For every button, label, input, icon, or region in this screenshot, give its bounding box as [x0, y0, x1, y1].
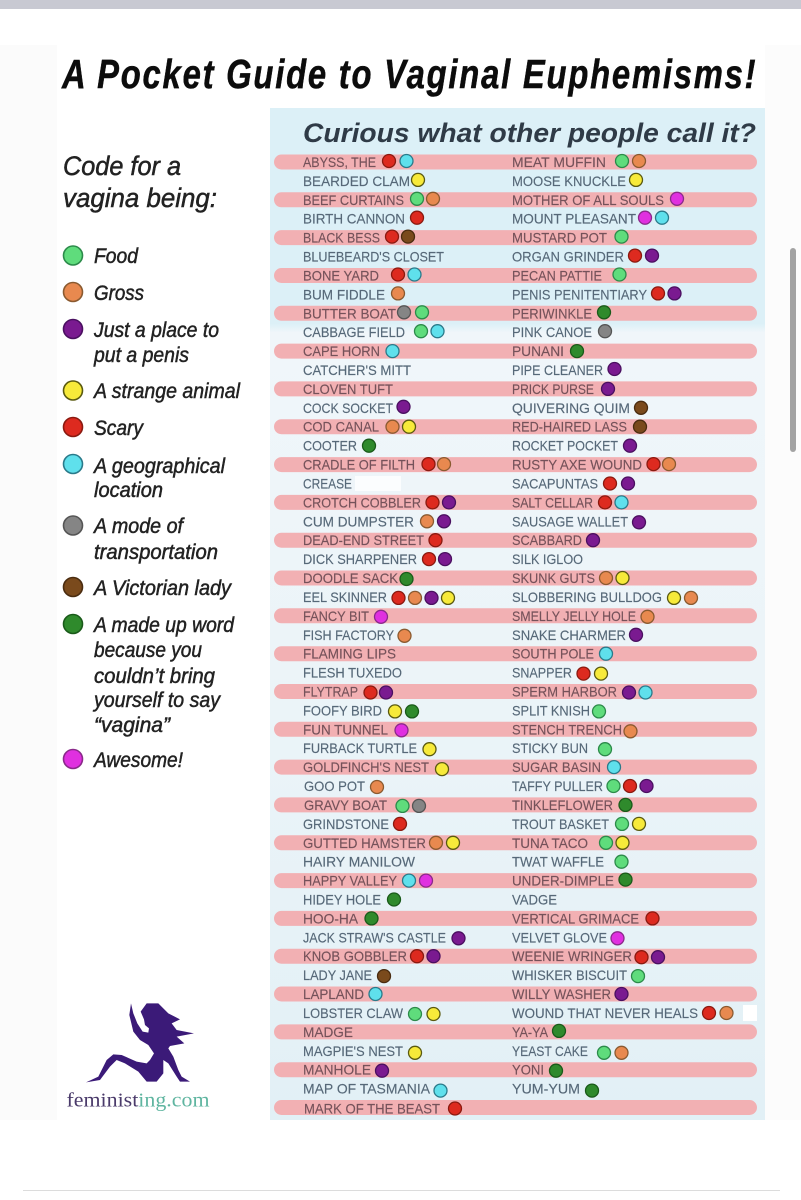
- row: WILLY WASHER: [512, 986, 611, 1002]
- row: WEENIE WRINGER: [512, 948, 632, 964]
- legend: geographical location: [64, 454, 226, 502]
- legend: geographical location: location: [94, 478, 163, 502]
- row: FANCY BIT: [303, 608, 369, 624]
- row: SUGAR BASIN: [512, 759, 601, 775]
- legend: scary: [64, 416, 144, 440]
- row: YEAST CAKE: [512, 1043, 588, 1059]
- row: BLACK BESS: [303, 230, 380, 246]
- row: SACAPUNTAS: [512, 476, 598, 492]
- row: DOODLE SACK: [303, 570, 399, 586]
- row: CATCHER'S MITT: [303, 362, 411, 378]
- row: SOUTH POLE: [512, 646, 594, 662]
- row: FUN TUNNEL: [303, 721, 388, 737]
- row: SPLIT KNISH: [512, 702, 590, 718]
- row: BEARDED CLAM: [303, 173, 410, 189]
- row: EEL SKINNER: [303, 589, 387, 605]
- row: MADGE: [303, 1024, 353, 1040]
- row: BLUEBEARD'S CLOSET: [303, 249, 444, 265]
- row: CABBAGE FIELD: [303, 324, 405, 340]
- row: MUSTARD POT: [512, 230, 607, 246]
- legend: gross: [64, 281, 144, 305]
- row: [512, 1062, 562, 1078]
- row: DEAD-END STREET: [303, 532, 424, 548]
- row: STICKY BUN: [512, 740, 588, 756]
- right column: [512, 154, 733, 1097]
- legend heading: vagina being:: [63, 183, 217, 213]
- row: LADY JANE: [303, 967, 372, 983]
- row: SKUNK GUTS: [512, 570, 595, 586]
- legend panel: [63, 151, 241, 772]
- row: SNAPPER: [512, 665, 572, 681]
- row: PINK CANOE: [512, 324, 592, 340]
- row: SPERM HARBOR: [512, 684, 617, 700]
- row: ROCKET POCKET: [512, 438, 618, 454]
- row: TUNA TACO: [512, 835, 588, 851]
- legend: place: [64, 318, 219, 367]
- row: KNOB GOBBLER: [303, 948, 407, 964]
- legend: made up word: because you: [94, 638, 202, 662]
- row: BUTTER BOAT: [303, 305, 396, 321]
- row: GUTTED HAMSTER: [303, 835, 426, 851]
- row: COD CANAL: [303, 419, 379, 435]
- legend heading: [63, 151, 217, 213]
- row: UNDER-DIMPLE: [512, 873, 614, 889]
- row: CAPE HORN: [303, 343, 380, 359]
- legend: gross: Gross: [94, 281, 144, 305]
- row: WOUND THAT NEVER HEALS: [512, 1005, 698, 1021]
- row: FISH FACTORY: [303, 627, 395, 643]
- row: MOTHER OF ALL SOULS: [512, 192, 664, 208]
- legend: geographical location: A geographical: [92, 454, 226, 478]
- row: MOUNT PLEASANT: [512, 211, 636, 227]
- legend: made up word: “vagina”: [94, 713, 171, 737]
- row: SAUSAGE WALLET: [512, 513, 628, 529]
- row: BEEF CURTAINS: [303, 192, 404, 208]
- legend: made up word: yourself to say: [92, 688, 221, 712]
- legend: transportation: transportation: [94, 540, 218, 564]
- row: MEAT MUFFIN: [512, 154, 606, 170]
- row: MOOSE KNUCKLE: [512, 173, 626, 189]
- row: LAPLAND: [303, 986, 364, 1002]
- row: SILK IGLOO: [512, 551, 583, 567]
- row: WHISKER BISCUIT: [512, 967, 627, 983]
- row: PENIS PENITENTIARY: [512, 286, 648, 302]
- row: BIRTH CANNON: [303, 211, 405, 227]
- row: RED-HAIRED LASS: [512, 419, 627, 435]
- legend: victorian lady: A Victorian lady: [92, 576, 232, 600]
- row: FLAMING LIPS: [303, 646, 396, 662]
- row: RUSTY AXE WOUND: [512, 457, 642, 473]
- row: TWAT WAFFLE: [512, 854, 604, 870]
- row: FLESH TUXEDO: [303, 665, 402, 681]
- legend: food: [64, 244, 139, 268]
- row: VELVET GLOVE: [512, 929, 607, 945]
- row: TINKLEFLOWER: [512, 797, 613, 813]
- row: PERIWINKLE: [512, 305, 592, 321]
- row: MARK OF THE BEAST: [304, 1100, 440, 1116]
- row: PECAN PATTIE: [512, 268, 602, 284]
- row: BONE YARD: [303, 268, 379, 284]
- row: [303, 684, 392, 700]
- row: TROUT BASKET: [512, 816, 609, 832]
- row: CROTCH COBBLER: [303, 494, 421, 510]
- row: CRADLE OF FILTH: [303, 457, 415, 473]
- row: FOOFY BIRD: [303, 702, 382, 718]
- row: GRAVY BOAT: [304, 797, 387, 813]
- legend: awesome: [64, 748, 183, 772]
- row: JACK STRAW'S CASTLE: [303, 929, 446, 945]
- legend items: [64, 244, 241, 772]
- row: BUM FIDDLE: [303, 286, 385, 302]
- row: CLOVEN TUFT: [303, 381, 393, 397]
- row: HAPPY VALLEY: [303, 873, 398, 889]
- row: YA-YA: [512, 1024, 549, 1040]
- row: ORGAN GRINDER: [512, 249, 624, 265]
- row: ABYSS, THE: [303, 154, 376, 170]
- row: SLOBBERING BULLDOG: [512, 589, 662, 605]
- row: SCABBARD: [512, 532, 582, 548]
- row: [512, 835, 629, 851]
- panel: euphemism list: [270, 108, 765, 1120]
- row: STENCH TRENCH: [512, 721, 622, 737]
- legend: scary: Scary: [94, 416, 144, 440]
- row: VADGE: [512, 892, 557, 908]
- legend: place: put a penis: [93, 343, 189, 367]
- row: PUNANI: [512, 343, 564, 359]
- title: A Pocket Guide to Vaginal Euphemisms!: [61, 50, 756, 97]
- row: GOLDFINCH'S NEST: [303, 759, 429, 775]
- row: MANHOLE: [303, 1062, 371, 1078]
- row: COOTER: [303, 438, 357, 454]
- row: [303, 268, 421, 284]
- row: GRINDSTONE: [303, 816, 389, 832]
- icon: silhouette: [86, 1003, 194, 1082]
- legend: transportation: [64, 514, 218, 564]
- row: FURBACK TURTLE: [303, 740, 417, 756]
- row: FLYTRAP: [303, 684, 358, 700]
- panel heading: Curious what other people call it?: [303, 118, 756, 148]
- row: CUM DUMPSTER: [303, 513, 414, 529]
- row: MAP OF TASMANIA: [303, 1081, 431, 1097]
- row: COCK SOCKET: [303, 400, 393, 416]
- row: TAFFY PULLER: [512, 778, 603, 794]
- legend: transportation: A mode of: [92, 514, 185, 538]
- row: YUM-YUM: [512, 1081, 580, 1097]
- row: GOO POT: [304, 778, 365, 794]
- legend: made up word: A made up word: [92, 613, 235, 637]
- legend: strange animal: A strange animal: [92, 379, 241, 403]
- row: SMELLY JELLY HOLE: [512, 608, 636, 624]
- row: HOO-HA: [303, 910, 359, 926]
- row: HAIRY MANILOW: [303, 854, 416, 870]
- legend heading: Code for a: [63, 151, 181, 181]
- row: SNAKE CHARMER: [512, 627, 626, 643]
- row: SALT CELLAR: [512, 494, 593, 510]
- row: QUIVERING QUIM: [512, 400, 630, 416]
- row: YONI: [512, 1062, 544, 1078]
- legend: awesome: Awesome!: [92, 748, 183, 772]
- legend: made up word: couldn’t bring: [94, 664, 215, 688]
- row: LOBSTER CLAW: [303, 1005, 404, 1021]
- row: PIPE CLEANER: [512, 362, 603, 378]
- legend: made up word: [64, 613, 235, 737]
- legend: place: Just a place to: [93, 318, 219, 342]
- row: CREASE: [303, 476, 352, 492]
- row: [303, 589, 454, 605]
- logo: feministing: [66, 1003, 210, 1112]
- logo text: feministing.com: [66, 1090, 210, 1112]
- row: MAGPIE'S NEST: [303, 1043, 403, 1059]
- left column: [303, 154, 465, 1116]
- row: DICK SHARPENER: [303, 551, 417, 567]
- row: PRICK PURSE: [512, 381, 594, 397]
- legend: food: Food: [94, 244, 139, 268]
- row: VERTICAL GRIMACE: [512, 910, 639, 926]
- row: HIDEY HOLE: [303, 892, 381, 908]
